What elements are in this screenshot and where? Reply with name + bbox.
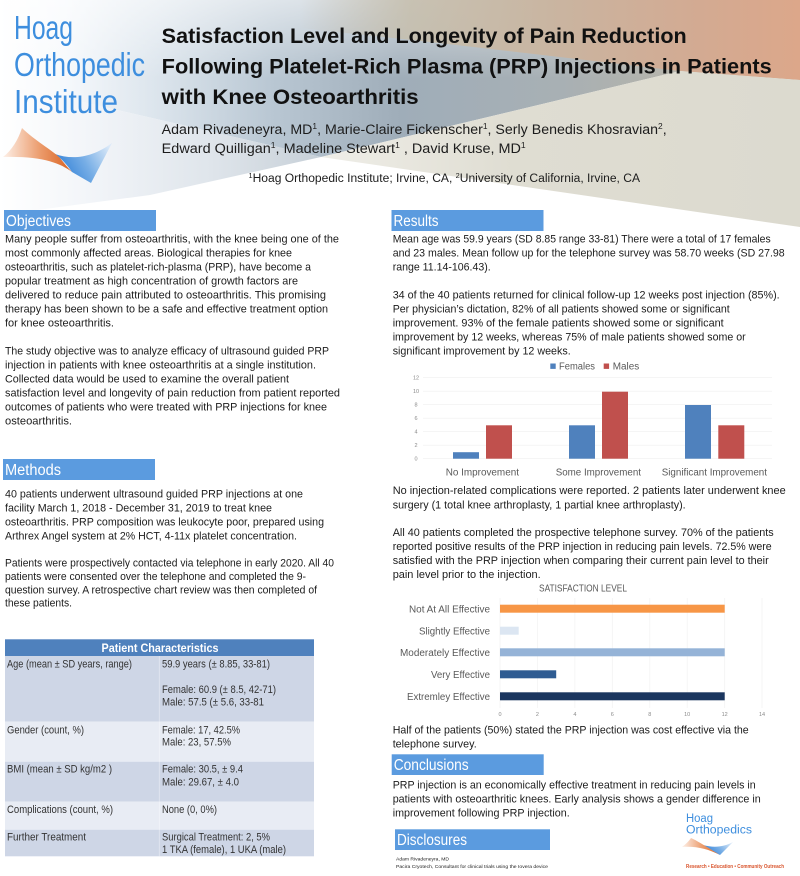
- title: Satisfaction Level and Longevity of Pain Reduction: [162, 25, 687, 48]
- text block: methods procedure: 40 patients underwent ultrasound guided PRP injections at one: [5, 488, 303, 500]
- y axis labels: 12: [413, 376, 419, 382]
- text block: methods procedure: Arthrex Angel system at 2% HCT, 4-11x platelet concentration.: [5, 530, 297, 542]
- title: with Knee Osteoarthritis: [161, 86, 419, 109]
- table: patient characteristics: Female: 30.5, ± 9.4: [162, 764, 243, 776]
- text block: methods procedure: facility March 1, 2018 - December 31, 2019 to treat knee: [5, 502, 272, 514]
- heading: conclusions: Conclusions: [394, 757, 469, 774]
- authors: Adam Rivadeneyra, MD: [162, 122, 305, 137]
- text block: objectives background: most commonly affected areas. Biological therapies for knee: [5, 248, 292, 260]
- heading: disclosures: Disclosures: [397, 832, 467, 849]
- heading: methods: Methods: [5, 462, 61, 479]
- legend: [550, 362, 639, 372]
- affiliations: University of California, Irvine, CA: [460, 173, 640, 185]
- table: patient characteristics: Gender (count, %): [7, 724, 84, 736]
- text block: study objective: outcomes of patients who were treated with PRP injections for knee: [5, 402, 327, 414]
- x axis labels: No Improvement: [446, 468, 519, 479]
- panel: objectives: [4, 210, 340, 428]
- text block: conclusions: improvement following PRP injection.: [393, 807, 570, 819]
- table: patient characteristics: Male: 29.67, ± 4.0: [162, 777, 239, 789]
- text block: telephone survey: [393, 527, 774, 581]
- text block: objectives background: therapy has been shown to be a safe and effective treatment option: [5, 304, 328, 316]
- panel: conclusions: [392, 754, 761, 819]
- affiliations: 1: [248, 173, 253, 180]
- text block: study objective: The study objective was to analyze efficacy of ultrasound guided PRP: [5, 346, 329, 358]
- text block: telephone survey: satisfied with the PRP injection when comparing their current pain level to their: [393, 555, 769, 567]
- x axis labels: 2: [536, 712, 539, 718]
- table: patient characteristics: Further Treatment: [7, 831, 86, 843]
- text block: complications: surgery (1 total knee arthroplasty, 1 partial knee arthroplasty).: [393, 499, 686, 511]
- header background: [0, 0, 800, 227]
- logo: Hoag Orthopedic Institute: Hoag: [14, 9, 73, 46]
- bars: males: [486, 392, 744, 459]
- affiliations: Hoag Orthopedic Institute; Irvine, CA,: [253, 173, 456, 185]
- category labels: Very Effective: [431, 670, 490, 681]
- heading: objectives: Objectives: [6, 213, 71, 230]
- x axis labels: 8: [648, 712, 651, 718]
- category labels: Slightly Effective: [419, 626, 490, 638]
- text block: telephone survey: All 40 patients completed the prospective telephone survey. 70% of the patients: [393, 527, 774, 539]
- text block: conclusions: patients with osteoarthritic knees. Early analysis shows a gender difference in: [393, 793, 761, 805]
- logo: Hoag Orthopedic Institute: Institute: [14, 83, 118, 120]
- table: patient characteristics: BMI (mean ± SD kg/m2 ): [7, 764, 112, 776]
- x axis labels: [446, 468, 767, 479]
- text block: methods procedure: [5, 488, 324, 542]
- title: [161, 25, 772, 109]
- category labels: Extremley Effective: [407, 692, 490, 703]
- affiliations: 2: [456, 173, 460, 180]
- text block: telephone survey: pain level prior to the injection.: [393, 569, 541, 581]
- text block: clinical follow-up: 34 of the 40 patients returned for clinical follow-up 12 weeks post injection (85%).: [393, 290, 780, 302]
- x axis labels: 12: [722, 712, 728, 718]
- category labels: Moderately Effective: [400, 648, 490, 659]
- legend: Females: [559, 362, 595, 372]
- y axis labels: [413, 376, 419, 463]
- title: Following Platelet-Rich Plasma (PRP) Injections in Patients: [162, 56, 772, 79]
- authors: , David Kruse, MD: [400, 141, 521, 156]
- bar chart: improvement by gender: [413, 362, 772, 479]
- heading: methods: [3, 459, 155, 480]
- table: patient characteristics: 59.9 years (± 8.85, 33-81): [162, 659, 270, 671]
- heading: results: Results: [394, 213, 439, 230]
- text block: cost effectiveness: Half of the patients (50%) stated the PRP injection was cost effective via the: [393, 724, 749, 736]
- text block: disclosure details: Adam Rivadeneyra, MD: [396, 856, 450, 862]
- authors: , Marie-Claire Fickenscher: [317, 122, 483, 137]
- panel: results: [392, 210, 786, 750]
- text block: objectives background: for knee osteoarthritis.: [5, 318, 114, 330]
- x axis labels: 6: [611, 712, 614, 718]
- y axis labels: 10: [413, 389, 419, 395]
- table: patient characteristics: Male: 57.5 (± 5.6, 33-81: [162, 697, 264, 709]
- logo: Hoag Orthopedic Institute: Orthopedic: [14, 46, 145, 83]
- text block: methods survey: Patients were prospectively contacted via telephone in early 2020. All 40: [5, 557, 334, 569]
- text block: methods survey: these patients.: [5, 598, 72, 610]
- panel: methods: [3, 459, 334, 610]
- table: patient characteristics: Female: 60.9 (± 8.5, 42-71): [162, 684, 276, 696]
- category labels: [400, 604, 490, 703]
- x axis labels: 10: [684, 712, 690, 718]
- x axis labels: 0: [498, 712, 502, 718]
- x axis labels: Significant Improvement: [662, 468, 767, 479]
- logo: Hoag Orthopedics: Research • Education • Community Outreach: [686, 864, 784, 870]
- authors: 2: [658, 122, 663, 131]
- text block: clinical follow-up: [393, 290, 780, 358]
- heading: results: [392, 210, 544, 231]
- text block: study objective: osteoarthritis.: [5, 416, 72, 428]
- text block: cost effectiveness: [393, 724, 749, 750]
- table: patient characteristics: Male: 23, 57.5%: [162, 737, 231, 749]
- text block: methods procedure: osteoarthritis. PRP composition was leukocyte poor, prepared using: [5, 516, 324, 528]
- icon: logo swoosh: [3, 128, 112, 183]
- text block: disclosure details: [396, 856, 548, 870]
- text block: objectives background: Many people suffer from osteoarthritis, with the knee being one of the: [5, 234, 339, 246]
- authors: 1: [271, 141, 276, 150]
- text block: objectives background: osteoarthritis, such as platelet-rich-plasma (PRP), have become a: [5, 262, 312, 274]
- bars: satisfaction: [500, 605, 725, 700]
- text block: complications: No injection-related complications were reported. 2 patients later underwent knee: [393, 485, 786, 497]
- authors: 1: [521, 141, 526, 150]
- bar chart: satisfaction level: [400, 584, 765, 718]
- x axis labels: 14: [759, 712, 765, 718]
- authors: 1: [483, 122, 488, 131]
- table: patient characteristics: Complications (count, %): [7, 804, 113, 816]
- category labels: Not At All Effective: [409, 604, 490, 616]
- heading: conclusions: [392, 754, 544, 775]
- y axis labels: 2: [414, 443, 418, 449]
- legend: Males: [613, 362, 639, 372]
- authors: , Madeline Stewart: [276, 141, 395, 156]
- table: patient characteristics: Patient Characteristics: [102, 643, 218, 655]
- x axis labels: [498, 712, 765, 718]
- bar chart: satisfaction level: SATISFACTION LEVEL: [539, 584, 627, 595]
- x axis labels: 4: [573, 712, 576, 718]
- y axis labels: 8: [414, 403, 418, 409]
- bars: females: [453, 405, 711, 459]
- text block: clinical follow-up: improvement. 93% of the female patients showed some or significant: [393, 318, 724, 330]
- text block: study objective: injection in patients with knee osteoarthritis at a single institution.: [5, 360, 316, 372]
- text block: study objective: Collected data would be used to examine the overall patient: [5, 374, 290, 386]
- text block: cost effectiveness: telephone survey.: [393, 738, 477, 750]
- text block: clinical follow-up: Per physician’s dictation, 82% of all patients showed some or significant: [393, 304, 730, 316]
- text block: demographics: range 11.14-106.43).: [393, 262, 491, 274]
- text block: demographics: [393, 234, 785, 274]
- authors: ,: [663, 122, 667, 137]
- x axis labels: Some Improvement: [556, 468, 641, 479]
- text block: objectives background: [5, 234, 339, 330]
- authors: [162, 122, 667, 156]
- text block: objectives background: delivered to reduce pain attributed to osteoarthritis. This promising: [5, 290, 326, 302]
- authors: 1: [312, 122, 318, 131]
- y axis labels: 4: [414, 430, 418, 436]
- y axis labels: 6: [414, 416, 418, 422]
- text block: study objective: satisfaction level and longevity of pain reduction from patient reported: [5, 388, 340, 400]
- text block: methods survey: [5, 557, 334, 610]
- authors: 1: [395, 141, 400, 150]
- logo: Hoag Orthopedic Institute: [14, 9, 145, 120]
- logo: Hoag Orthopedics: [682, 813, 784, 870]
- text block: complications: [393, 485, 786, 511]
- text block: demographics: Mean age was 59.9 years (SD 8.85 range 33-81) There were a total of 17 females: [393, 234, 771, 246]
- table: patient characteristics: Age (mean ± SD years, range): [7, 659, 132, 671]
- logo: Hoag Orthopedics: Orthopedics: [686, 825, 752, 837]
- authors: Edward Quilligan: [162, 141, 264, 156]
- text block: telephone survey: reported positive results of the PRP injection in reducing pain levels. 72.5% were: [393, 541, 772, 553]
- text block: objectives background: popular treatment as high concentration of growth factors are: [5, 276, 298, 288]
- logo: Hoag Orthopedics: Hoag: [686, 813, 713, 825]
- text block: methods survey: question survey. A retrospective chart review was then completed of: [5, 584, 318, 596]
- heading: objectives: [4, 210, 156, 231]
- table: patient characteristics: Surgical Treatment: 2, 5%: [162, 831, 270, 843]
- table: patient characteristics: [5, 639, 314, 856]
- authors: , Serly Benedis Khosravian: [488, 122, 658, 137]
- text block: clinical follow-up: significant improvement by 12 weeks.: [393, 346, 571, 358]
- text block: conclusions: [393, 779, 761, 819]
- text block: methods survey: patients were consented over the telephone and completed the 9-: [5, 571, 306, 583]
- text block: study objective: [5, 346, 340, 428]
- y axis labels: 0: [414, 457, 418, 463]
- table: patient characteristics: 1 TKA (female), 1 UKA (male): [162, 844, 286, 856]
- text block: conclusions: PRP injection is an economically effective treatment in reducing pain levels in: [393, 779, 756, 791]
- panel: disclosures: [395, 829, 550, 870]
- table: patient characteristics: None (0, 0%): [162, 804, 217, 816]
- table: patient characteristics: Female: 17, 42.5%: [162, 724, 240, 736]
- text block: clinical follow-up: improvement by 12 weeks, whereas 75% of male patients showed some or: [393, 332, 746, 344]
- text block: disclosure details: Pacira Cryotech, Consultant for clinical trials using the Iovera device: [396, 864, 548, 870]
- heading: disclosures: [395, 829, 550, 850]
